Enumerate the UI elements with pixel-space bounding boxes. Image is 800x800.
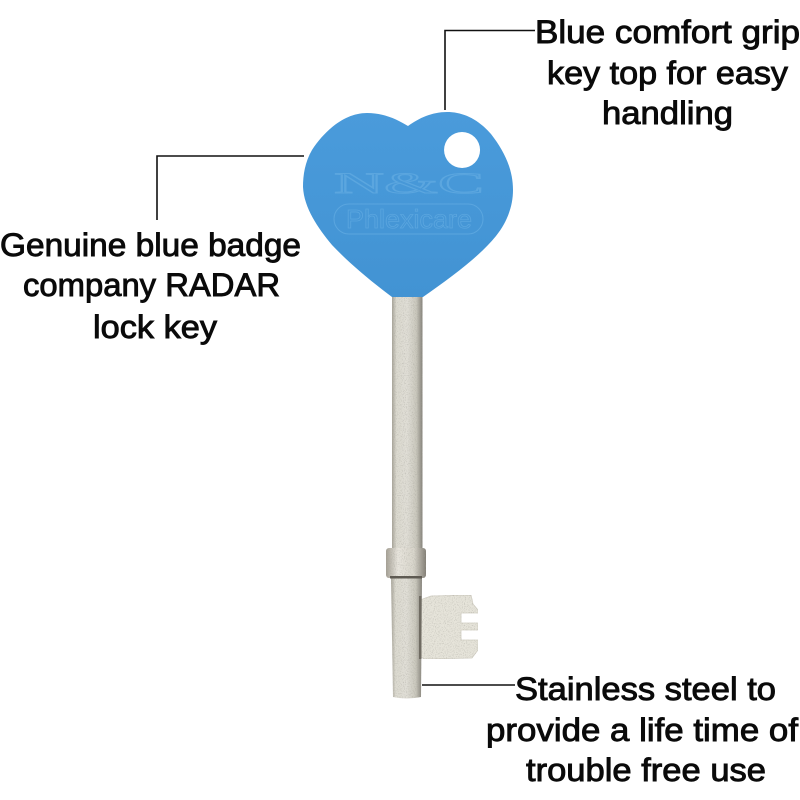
leader line [445, 30, 535, 110]
callout: genuine key [0, 156, 304, 345]
leader line [422, 684, 515, 686]
collar [386, 548, 426, 578]
callout text: Genuine blue badge [0, 227, 301, 263]
callout text [0, 227, 301, 345]
callout: stainless steel [422, 671, 798, 788]
callout text [486, 671, 798, 788]
callout text [535, 14, 800, 131]
key illustration [303, 112, 513, 698]
key bit [420, 595, 478, 659]
callout text: trouble free use [526, 752, 766, 788]
key shaft [392, 294, 422, 550]
callout text: provide a life time of [486, 712, 798, 748]
leader line [157, 156, 304, 220]
callout text: Stainless steel to [515, 671, 776, 707]
lower shaft [391, 577, 422, 698]
callout text: company RADAR [23, 267, 280, 303]
callout text: key top for easy [547, 55, 788, 91]
callout text: Blue comfort grip [535, 14, 800, 50]
embossed logo: Phlexicare [346, 204, 472, 234]
embossed logo: N&C [334, 167, 484, 200]
callout text: lock key [93, 309, 217, 345]
embossed logo [334, 167, 484, 234]
callout: blue comfort grip [445, 14, 800, 131]
heart key top [303, 112, 513, 297]
callout text: handling [602, 95, 733, 131]
